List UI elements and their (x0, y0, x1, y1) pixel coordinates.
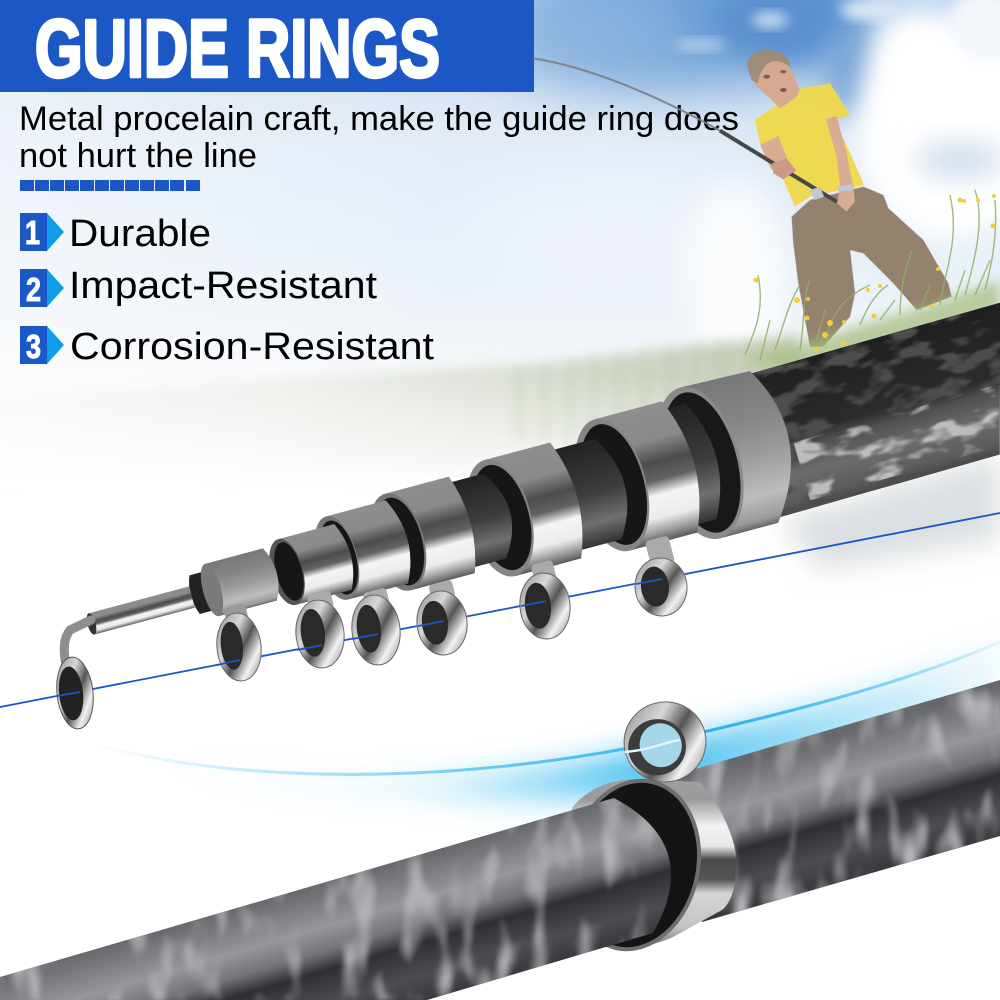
collar 3 (360, 474, 483, 597)
banner (0, 0, 534, 92)
guide eye 3 (293, 589, 347, 670)
feature 2: 2 (26, 271, 41, 308)
foreground grass and flowers (740, 190, 1000, 370)
hazy grass background (0, 335, 810, 490)
description text: not hurt the line (19, 137, 257, 175)
guide eye 7 (632, 535, 690, 619)
feature 3: 3 (26, 328, 41, 365)
collar 6 (641, 364, 809, 549)
shirt (755, 83, 864, 207)
tip collar (184, 547, 284, 622)
description text: Metal procelain craft, make the guide ring does (19, 100, 739, 138)
rod shadow (780, 455, 1000, 570)
guide eye 6 (517, 560, 573, 641)
lower rod left section (0, 798, 671, 1000)
ring opening (551, 766, 717, 964)
feature 1 (20, 212, 211, 255)
reel and watch (810, 184, 853, 200)
main rod body (734, 303, 1000, 519)
guide eye 4 (348, 587, 404, 667)
tube between collars 4 and 5 (487, 434, 638, 568)
right arm (826, 116, 855, 212)
collar 1 (263, 522, 360, 609)
title: GUIDE RINGS (35, 4, 440, 94)
tip guide eye (53, 620, 97, 731)
head (747, 50, 800, 108)
guide eye 2 (214, 602, 264, 683)
upper telescopic rod (85, 303, 1000, 636)
lower rod right section (661, 680, 1000, 922)
blue fishing line (0, 513, 1000, 707)
feature 1: Durable (69, 213, 211, 255)
hand (772, 158, 796, 179)
pants (792, 187, 952, 347)
tube between collars 3 and 4 (387, 469, 521, 585)
collar 4 (455, 439, 593, 584)
dashed divider (20, 180, 200, 191)
large guide eye (615, 693, 715, 791)
held rod (720, 131, 837, 202)
lower rod close-up (0, 680, 1000, 1000)
lower ring band (572, 779, 737, 947)
feature 3: Corrosion-Resistant (70, 326, 434, 368)
fisherman photo (533, 50, 952, 347)
collar 2 (307, 498, 419, 605)
guide eye 5 (414, 579, 470, 657)
cyan line swoosh (90, 640, 1000, 800)
thin rod tip (533, 58, 720, 131)
tube between collars 5 and 6 (596, 399, 732, 543)
collar 5 (562, 397, 712, 559)
left arm (760, 136, 796, 179)
feature 1: 1 (25, 214, 40, 251)
metal tip tube (85, 586, 195, 636)
feature 2: Impact-Resistant (69, 265, 377, 307)
description text (19, 100, 739, 175)
